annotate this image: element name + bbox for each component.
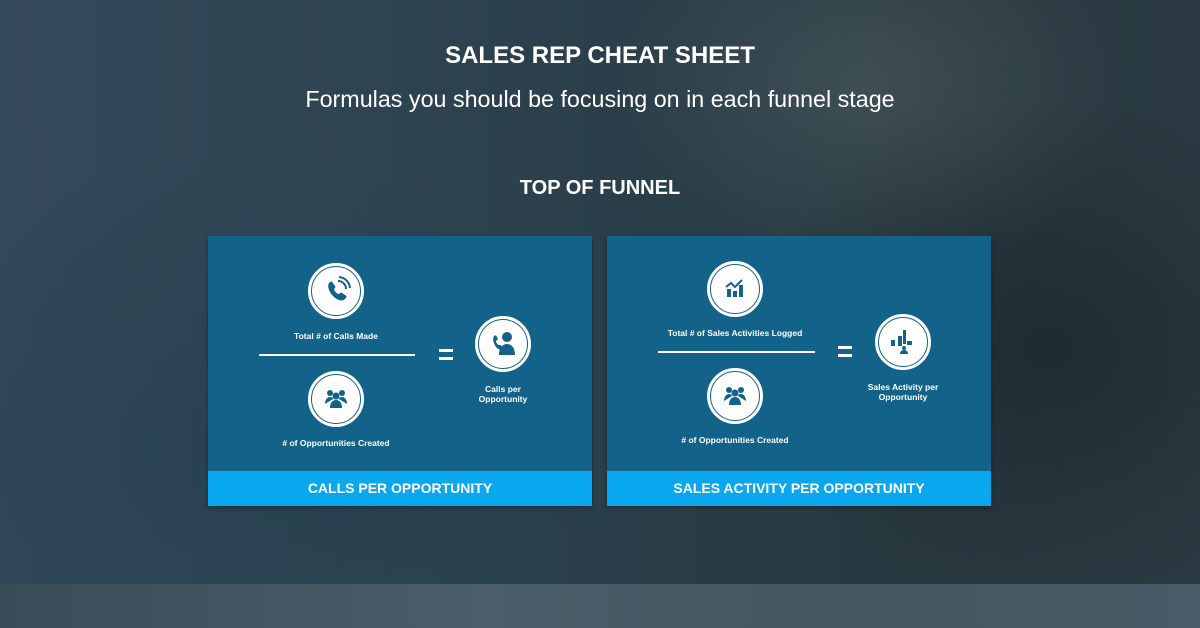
label: denominator: # of Opportunities Created [282, 438, 390, 448]
equals [838, 346, 852, 357]
icon: group [707, 368, 763, 424]
icon: bar chart [707, 261, 763, 317]
subtitle: Formulas you should be focusing on in each funnel stage [305, 86, 895, 112]
footer label: CALLS PER OPPORTUNITY [308, 480, 492, 496]
label: result: Sales Activity per [868, 382, 938, 392]
title: SALES REP CHEAT SHEET [445, 42, 755, 69]
footer label: SALES ACTIVITY PER OPPORTUNITY [673, 480, 925, 496]
icon: activity chart [875, 314, 931, 370]
icon: rep with phone [475, 316, 531, 372]
label: numerator: Total # of Calls Made [294, 331, 378, 341]
label: numerator: Total # of Sales Activities Logged [668, 328, 802, 338]
icon: phone [308, 263, 364, 319]
footer label [607, 471, 991, 506]
label: result: Opportunity [879, 392, 927, 402]
label: result: Calls per [485, 384, 521, 394]
section heading: TOP OF FUNNEL [520, 177, 680, 199]
label: result: Opportunity [479, 394, 527, 404]
icon: group [308, 371, 364, 427]
panel: sales activity per opportunity [607, 236, 991, 506]
label: denominator: # of Opportunities Created [681, 435, 789, 445]
label: result [868, 382, 938, 402]
equals [439, 349, 453, 360]
panel: calls per opportunity [208, 236, 592, 506]
footer label [208, 471, 592, 506]
label: result [479, 384, 528, 404]
